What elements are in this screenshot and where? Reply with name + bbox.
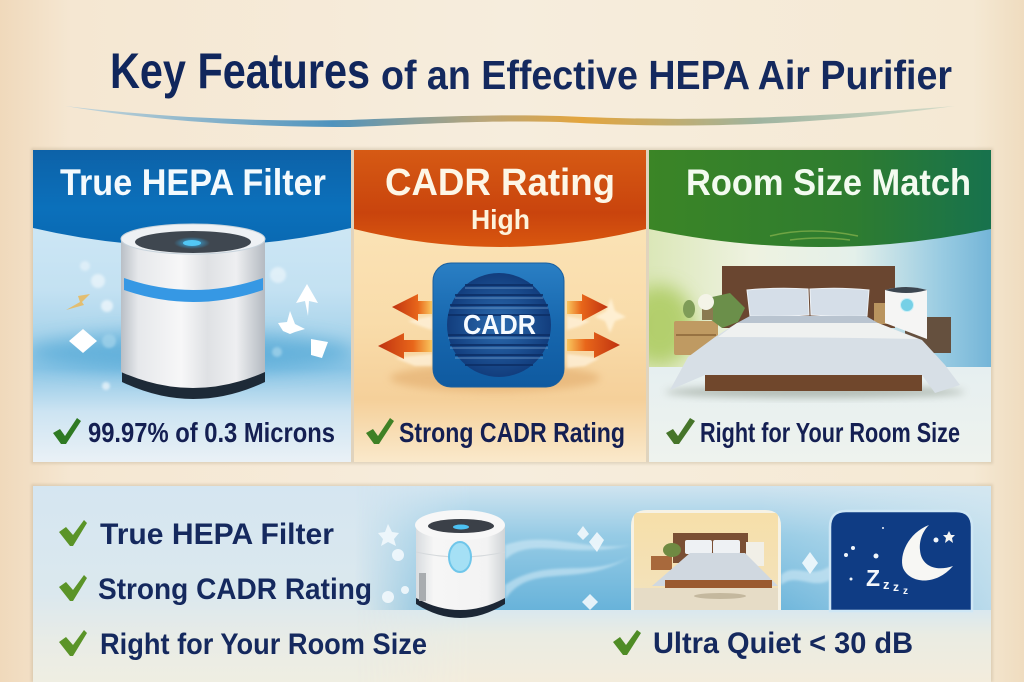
icon: check mark bbox=[53, 418, 81, 444]
heading: Room Size Match: Room Size Match bbox=[686, 162, 971, 203]
icon: air purifier cylinder bbox=[121, 224, 265, 399]
icon: check mark bbox=[59, 520, 87, 546]
airflow wave glow bbox=[25, 332, 355, 372]
small purifier bbox=[885, 287, 927, 339]
checklist item: Ultra Quiet: Ultra Quiet < 30 dB bbox=[653, 627, 913, 660]
feature label: 99.97% of 0.3 Microns bbox=[88, 417, 335, 448]
icon: check mark bbox=[59, 575, 87, 601]
heading: True HEPA Filter: True HEPA Filter bbox=[60, 162, 326, 203]
sleep zzz: z bbox=[903, 586, 908, 597]
duvet bbox=[670, 323, 960, 393]
panel shadows bbox=[31, 148, 993, 682]
title bbox=[110, 43, 952, 99]
floor shadow bbox=[665, 386, 965, 398]
panel: summary strip bbox=[33, 486, 991, 682]
heading: CADR Rating: CADR Rating bbox=[385, 162, 615, 204]
star glint bbox=[595, 298, 626, 333]
checklist item: Strong CADR Rating: Strong CADR Rating bbox=[98, 573, 372, 606]
spark bbox=[66, 294, 90, 310]
headboard bbox=[722, 266, 895, 328]
panel: True HEPA Filter bbox=[25, 150, 355, 462]
panel header: blue bbox=[33, 150, 351, 246]
sleep zzz bbox=[866, 565, 908, 597]
bed frame bbox=[705, 375, 922, 391]
plant bbox=[711, 293, 745, 328]
CADR label: CADR bbox=[463, 309, 536, 340]
icon: bedroom scene bbox=[665, 266, 965, 398]
air swirl bbox=[505, 540, 830, 600]
particles bbox=[378, 524, 818, 610]
particles bbox=[69, 261, 328, 390]
sleep zzz: z bbox=[893, 580, 899, 594]
subheading: High: High bbox=[471, 204, 530, 235]
panel header: green bbox=[649, 150, 991, 247]
icon: bedroom card bbox=[631, 510, 781, 610]
panel: CADR Rating bbox=[354, 150, 646, 462]
panel: Room Size Match bbox=[626, 150, 991, 462]
checklist item: Right for Your Room Size: Right for Your Room Size bbox=[100, 628, 427, 661]
illustration band bbox=[350, 486, 991, 682]
title underline swoosh bbox=[65, 106, 955, 127]
icon: check mark bbox=[59, 630, 87, 656]
right nightstand bbox=[905, 317, 951, 353]
left nightstand bbox=[674, 321, 718, 355]
arrow shadows bbox=[395, 316, 600, 368]
sleep zzz: z bbox=[883, 577, 890, 592]
title: Key Features bbox=[110, 43, 370, 99]
lower cream band bbox=[350, 610, 991, 682]
icon: check mark bbox=[666, 418, 695, 444]
icon: check mark bbox=[613, 630, 641, 655]
icon: night sleep card bbox=[830, 511, 972, 611]
icon: check mark bbox=[366, 418, 394, 444]
feature label: Strong CADR Rating bbox=[399, 417, 625, 448]
green side glow bbox=[626, 285, 694, 365]
arrows: airflow bbox=[378, 294, 620, 359]
pillows bbox=[747, 288, 809, 316]
header ornament bbox=[770, 231, 858, 240]
icon: CADR fan unit bbox=[433, 263, 564, 387]
blanket top band bbox=[737, 316, 878, 323]
feature label: Right for Your Room Size bbox=[700, 417, 960, 448]
title: of an Effective HEPA Air Purifier bbox=[381, 52, 952, 98]
panel header: orange bbox=[354, 150, 646, 247]
sleep zzz: Z bbox=[866, 565, 880, 591]
checklist item: True HEPA Filter: True HEPA Filter bbox=[100, 518, 334, 551]
floor shadow bbox=[390, 364, 600, 392]
feature label bbox=[53, 418, 334, 444]
icon: white air purifier bbox=[415, 510, 505, 618]
floor bbox=[649, 367, 991, 462]
